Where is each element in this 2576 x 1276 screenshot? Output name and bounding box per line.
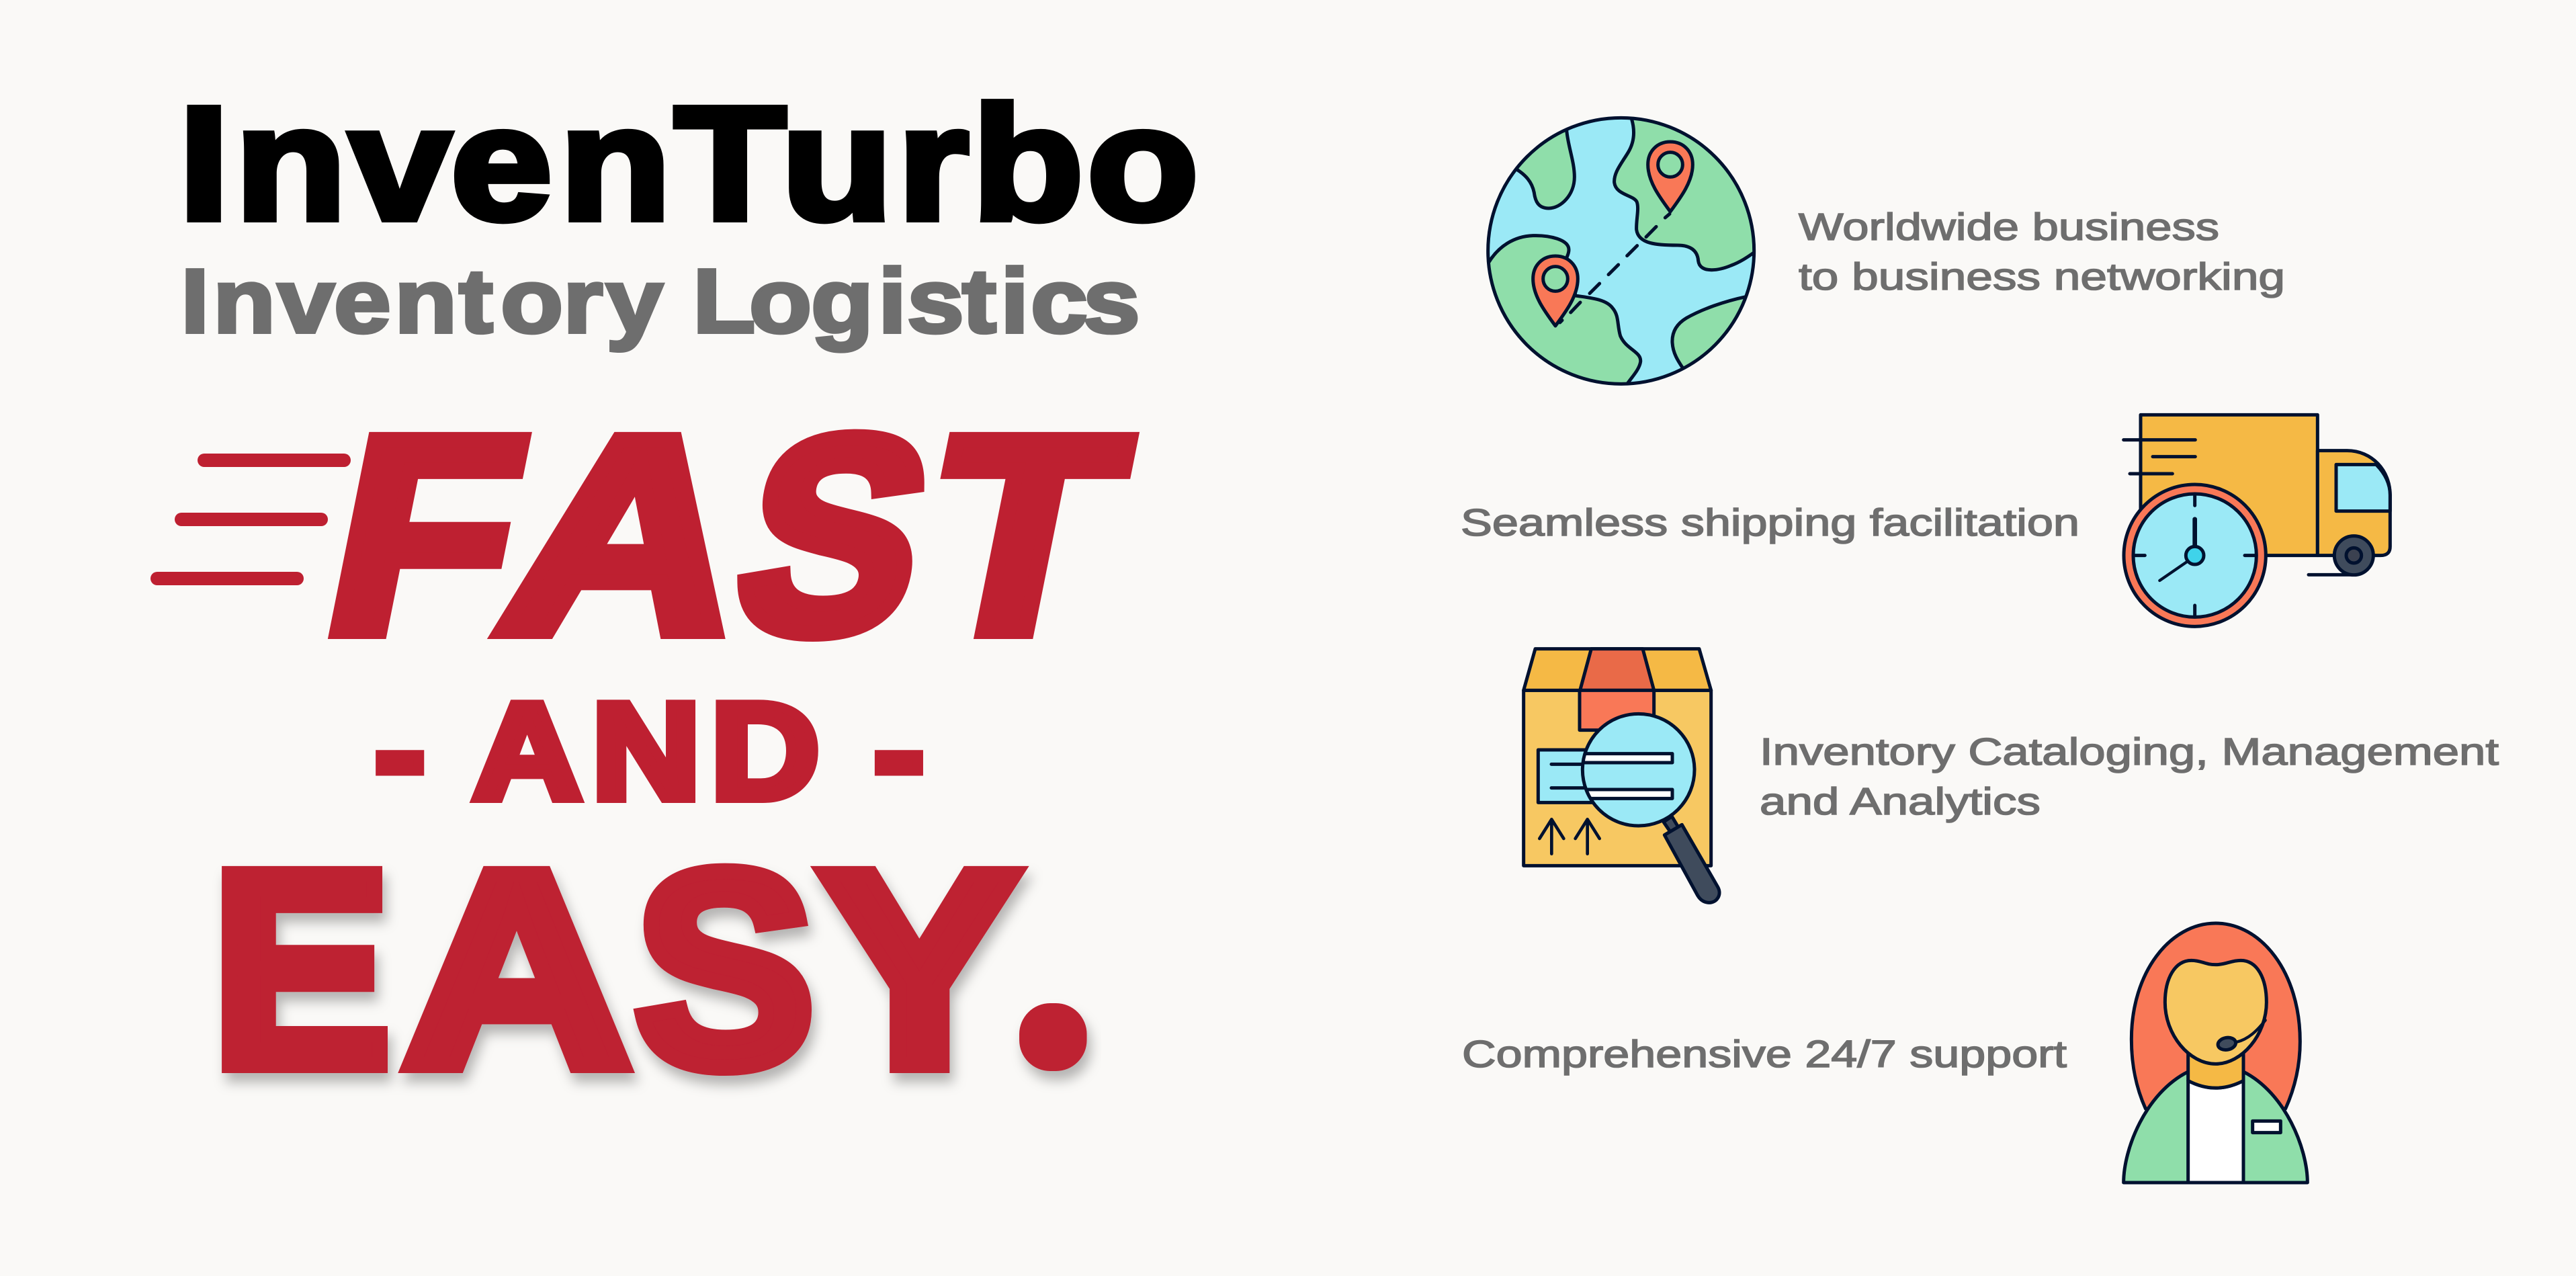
clock [2124,484,2266,626]
text: inventory management [1760,730,2499,823]
pin: origin [1533,256,1578,326]
icon: delivery truck with clock [2124,415,2390,626]
headline: EASY: S [635,814,814,1124]
headline: AND: - AND - [375,675,924,828]
text: worldwide networking [1799,206,2285,298]
magnifying glass [1565,714,1719,902]
text: shipping: Seamless shipping facilitation [1461,501,2079,544]
text: inventory management: Inventory Cataloging, Management [1760,730,2499,773]
headline: EASY: Y [820,814,1019,1124]
headline: FAST: T [903,380,1145,690]
pin: destination [1648,142,1692,212]
subtitle: Inventory Logistics: Inventory Logistics [181,251,1140,352]
icon: box with magnifying glass [1524,649,1719,902]
text: worldwide networking: to business networking [1799,255,2285,298]
headline: EASY: A [403,814,630,1124]
text: inventory management: and Analytics [1760,780,2041,823]
headline: FAST: S [716,380,953,690]
headline: FAST [306,380,1145,690]
headline: FAST: A [482,380,773,690]
icon: globe with map pins [1486,116,1756,386]
text: support: Comprehensive 24/7 support [1462,1033,2067,1076]
headline: EASY: . [1047,1004,1059,1049]
icon: support agent with headset [2124,923,2307,1183]
speed lines [151,454,351,585]
wheel [2334,536,2373,575]
headline: EASY: E [212,814,390,1124]
headline: EASY [212,814,1059,1124]
title: InvenTurbo: InvenTurbo [179,74,1199,254]
headline: FAST: F [306,380,545,690]
text: worldwide networking: Worldwide business [1799,206,2219,249]
